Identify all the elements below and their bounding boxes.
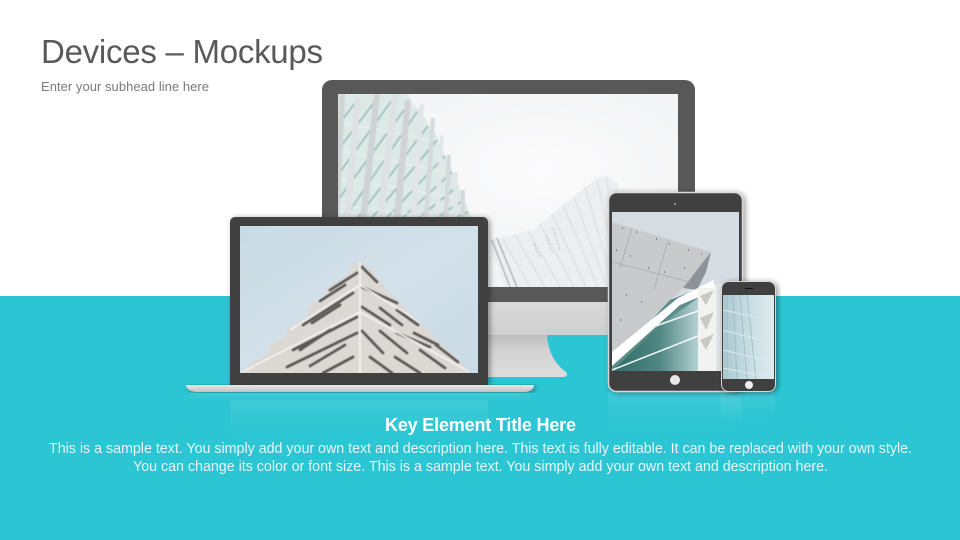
subhead: Enter your subhead line here (41, 79, 209, 94)
body text line 1: This is a sample text. You simply add your own text and description here. This text is fully editable. It can be replaced with your own style. (49, 441, 912, 457)
laptop base (186, 385, 534, 392)
device: laptop (186, 217, 534, 392)
device: desktop monitor (322, 80, 695, 377)
device: tablet (608, 192, 742, 392)
tablet camera (674, 203, 676, 205)
body text line 2: You can change its color or font size. This is a sample text. You simply add your own text and description here. (133, 459, 828, 475)
reflection: tablet (608, 392, 742, 432)
phone screen photo (723, 295, 774, 379)
monitor bezel (322, 80, 695, 302)
teal background band (0, 296, 960, 540)
title: Devices – Mockups (41, 33, 323, 70)
phone body (722, 282, 776, 392)
tablet screen photo (612, 212, 739, 371)
phone home button (745, 381, 753, 389)
phone speaker (745, 288, 753, 289)
reflection: laptop base (190, 392, 530, 402)
reflection: phone (721, 392, 775, 422)
monitor stand (488, 335, 567, 377)
laptop screen photo (240, 226, 478, 374)
tablet body (608, 192, 742, 392)
key element text block (49, 415, 912, 475)
reflections under devices (190, 392, 775, 440)
tablet home button (670, 375, 680, 385)
laptop lid (230, 217, 488, 385)
monitor silver chin (488, 302, 618, 335)
device: phone (722, 282, 776, 392)
key element title: Key Element Title Here (385, 415, 576, 435)
monitor screen photo (334, 92, 678, 287)
reflection: laptop body (230, 400, 488, 440)
